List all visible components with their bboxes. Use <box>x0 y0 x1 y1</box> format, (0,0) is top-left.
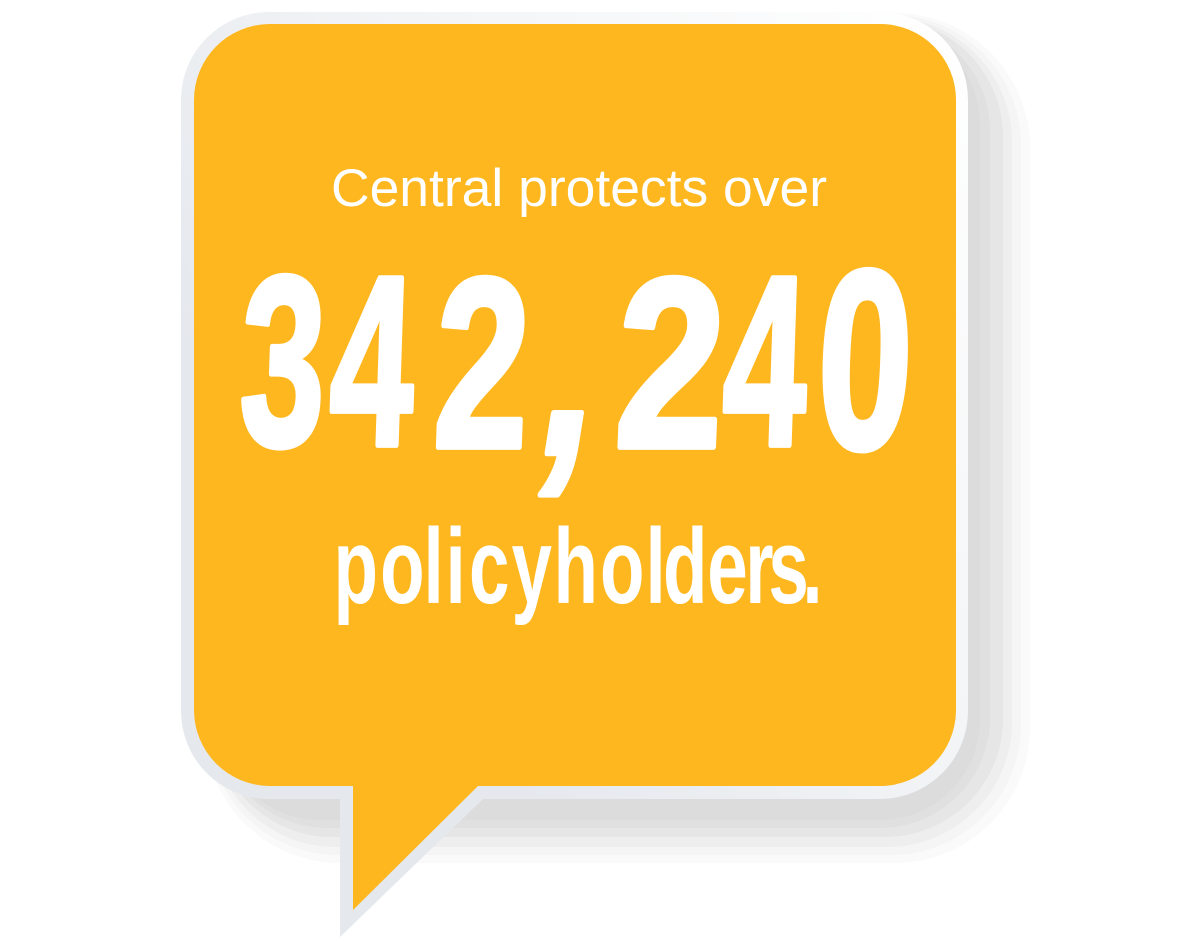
big number: 342,240 <box>236 211 918 510</box>
big number: 342,240: 3 <box>236 226 330 496</box>
big number: 342,240: 2 <box>611 228 731 499</box>
heading: Central protects over: Central protects over <box>331 159 827 218</box>
drop shadow <box>205 13 1030 863</box>
big number: 342,240: 4 <box>719 225 812 497</box>
bubble rim <box>181 12 968 937</box>
speech bubble <box>181 12 968 937</box>
big number: 342,240: 0 <box>813 217 918 502</box>
bubble fill <box>194 24 956 910</box>
big number: 342,240: 2 <box>430 228 535 499</box>
caption: policyholders.: policyholders. <box>333 507 823 626</box>
big number: 342,240: , <box>524 211 627 510</box>
big number: 342,240: 4 <box>326 225 419 497</box>
